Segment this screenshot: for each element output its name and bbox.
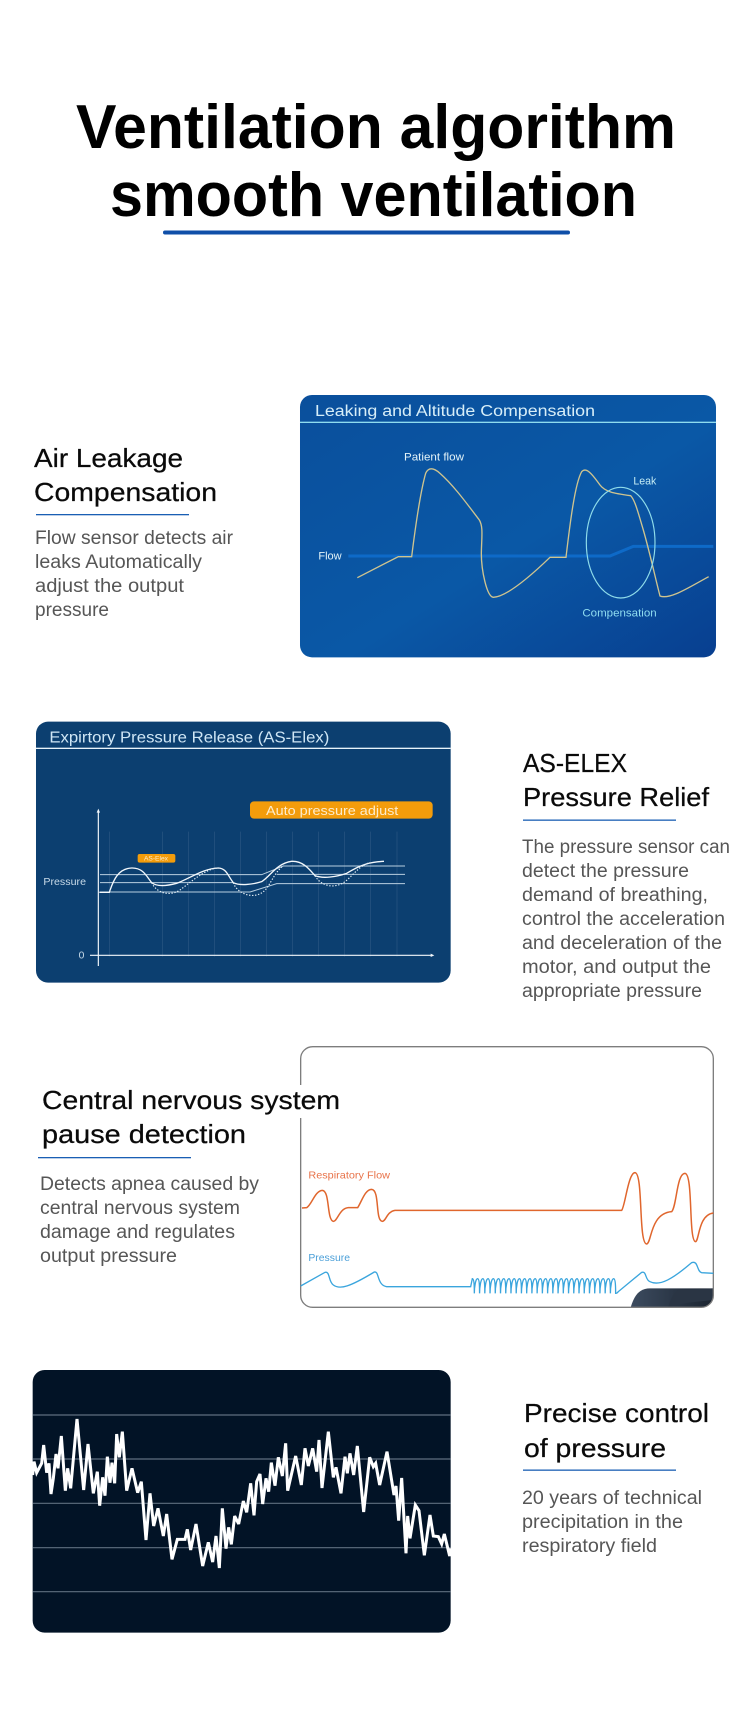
panel: expiratory pressure release chart <box>36 722 451 983</box>
text block: central nervous system pause detection: central nervous system <box>40 1198 240 1219</box>
text block: central nervous system pause detection: damage and regulates <box>40 1222 235 1243</box>
text block: precise control of pressure: Precise control <box>524 1398 709 1428</box>
panel: expiratory pressure release chart: AS-Elex <box>144 856 169 863</box>
title <box>76 93 676 230</box>
text block: air leakage compensation: pressure <box>35 600 109 621</box>
text block: precise control of pressure: respiratory field <box>522 1536 657 1557</box>
text block: central nervous system pause detection: pause detection <box>42 1119 246 1149</box>
text block: air leakage compensation: Air Leakage <box>34 443 183 473</box>
panel: respiratory flow and pressure chart: Pressure <box>308 1253 350 1264</box>
panel: respiratory flow and pressure chart: Respiratory Flow <box>308 1170 390 1181</box>
panel: leaking and altitude compensation chart: Leaking and Altitude Compensation <box>315 403 595 420</box>
panel: expiratory pressure release chart: 0 <box>79 950 85 961</box>
text block: as-elex pressure relief <box>522 748 730 1002</box>
text block: central nervous system pause detection: output pressure <box>40 1246 177 1267</box>
text block: precise control of pressure: 20 years of technical <box>522 1488 702 1509</box>
panel: expiratory pressure release chart: Auto pressure adjust <box>266 803 399 818</box>
text block: as-elex pressure relief: appropriate pressure <box>522 981 702 1002</box>
text block: air leakage compensation: leaks Automatically <box>35 552 203 573</box>
panel: leaking and altitude compensation chart <box>300 395 716 657</box>
panel: pressure noise chart <box>33 1370 451 1633</box>
text block: as-elex pressure relief: The pressure sensor can <box>522 837 730 858</box>
text block: central nervous system pause detection <box>38 1085 340 1267</box>
text block: central nervous system pause detection: Detects apnea caused by <box>40 1174 260 1195</box>
panel: leaking and altitude compensation chart: Compensation <box>582 608 657 620</box>
text block: precise control of pressure: precipitation in the <box>522 1512 683 1533</box>
text block: central nervous system pause detection: Central nervous system <box>42 1085 340 1115</box>
panel: leaking and altitude compensation chart: Patient flow <box>404 452 464 464</box>
text block: as-elex pressure relief: demand of breathing, <box>522 885 708 906</box>
title: smooth ventilation <box>110 161 637 230</box>
title underline <box>163 230 570 234</box>
text block: precise control of pressure <box>522 1398 709 1557</box>
text block: air leakage compensation <box>34 443 234 621</box>
text block: air leakage compensation: adjust the output <box>35 576 185 597</box>
text block: as-elex pressure relief: detect the pressure <box>522 861 689 882</box>
panel: leaking and altitude compensation chart: Flow <box>318 551 342 563</box>
text block: precise control of pressure: of pressure <box>524 1433 666 1463</box>
text block: as-elex pressure relief: Pressure Relief <box>523 782 710 812</box>
text block: as-elex pressure relief: motor, and output the <box>522 957 711 978</box>
title: Ventilation algorithm <box>76 93 676 162</box>
panel: respiratory flow and pressure chart <box>301 1047 713 1307</box>
panel: expiratory pressure release chart: Expirtory Pressure Release (AS-Elex) <box>49 730 329 747</box>
text block: as-elex pressure relief: control the acceleration <box>522 909 725 930</box>
text block: as-elex pressure relief: and deceleration of the <box>522 933 722 954</box>
text block: as-elex pressure relief: AS-ELEX <box>523 748 627 778</box>
text block: air leakage compensation: Flow sensor detects air <box>35 528 234 549</box>
panel: expiratory pressure release chart: Pressure <box>43 877 86 888</box>
text block: air leakage compensation: Compensation <box>34 477 217 507</box>
panel: leaking and altitude compensation chart: Leak <box>633 476 657 488</box>
